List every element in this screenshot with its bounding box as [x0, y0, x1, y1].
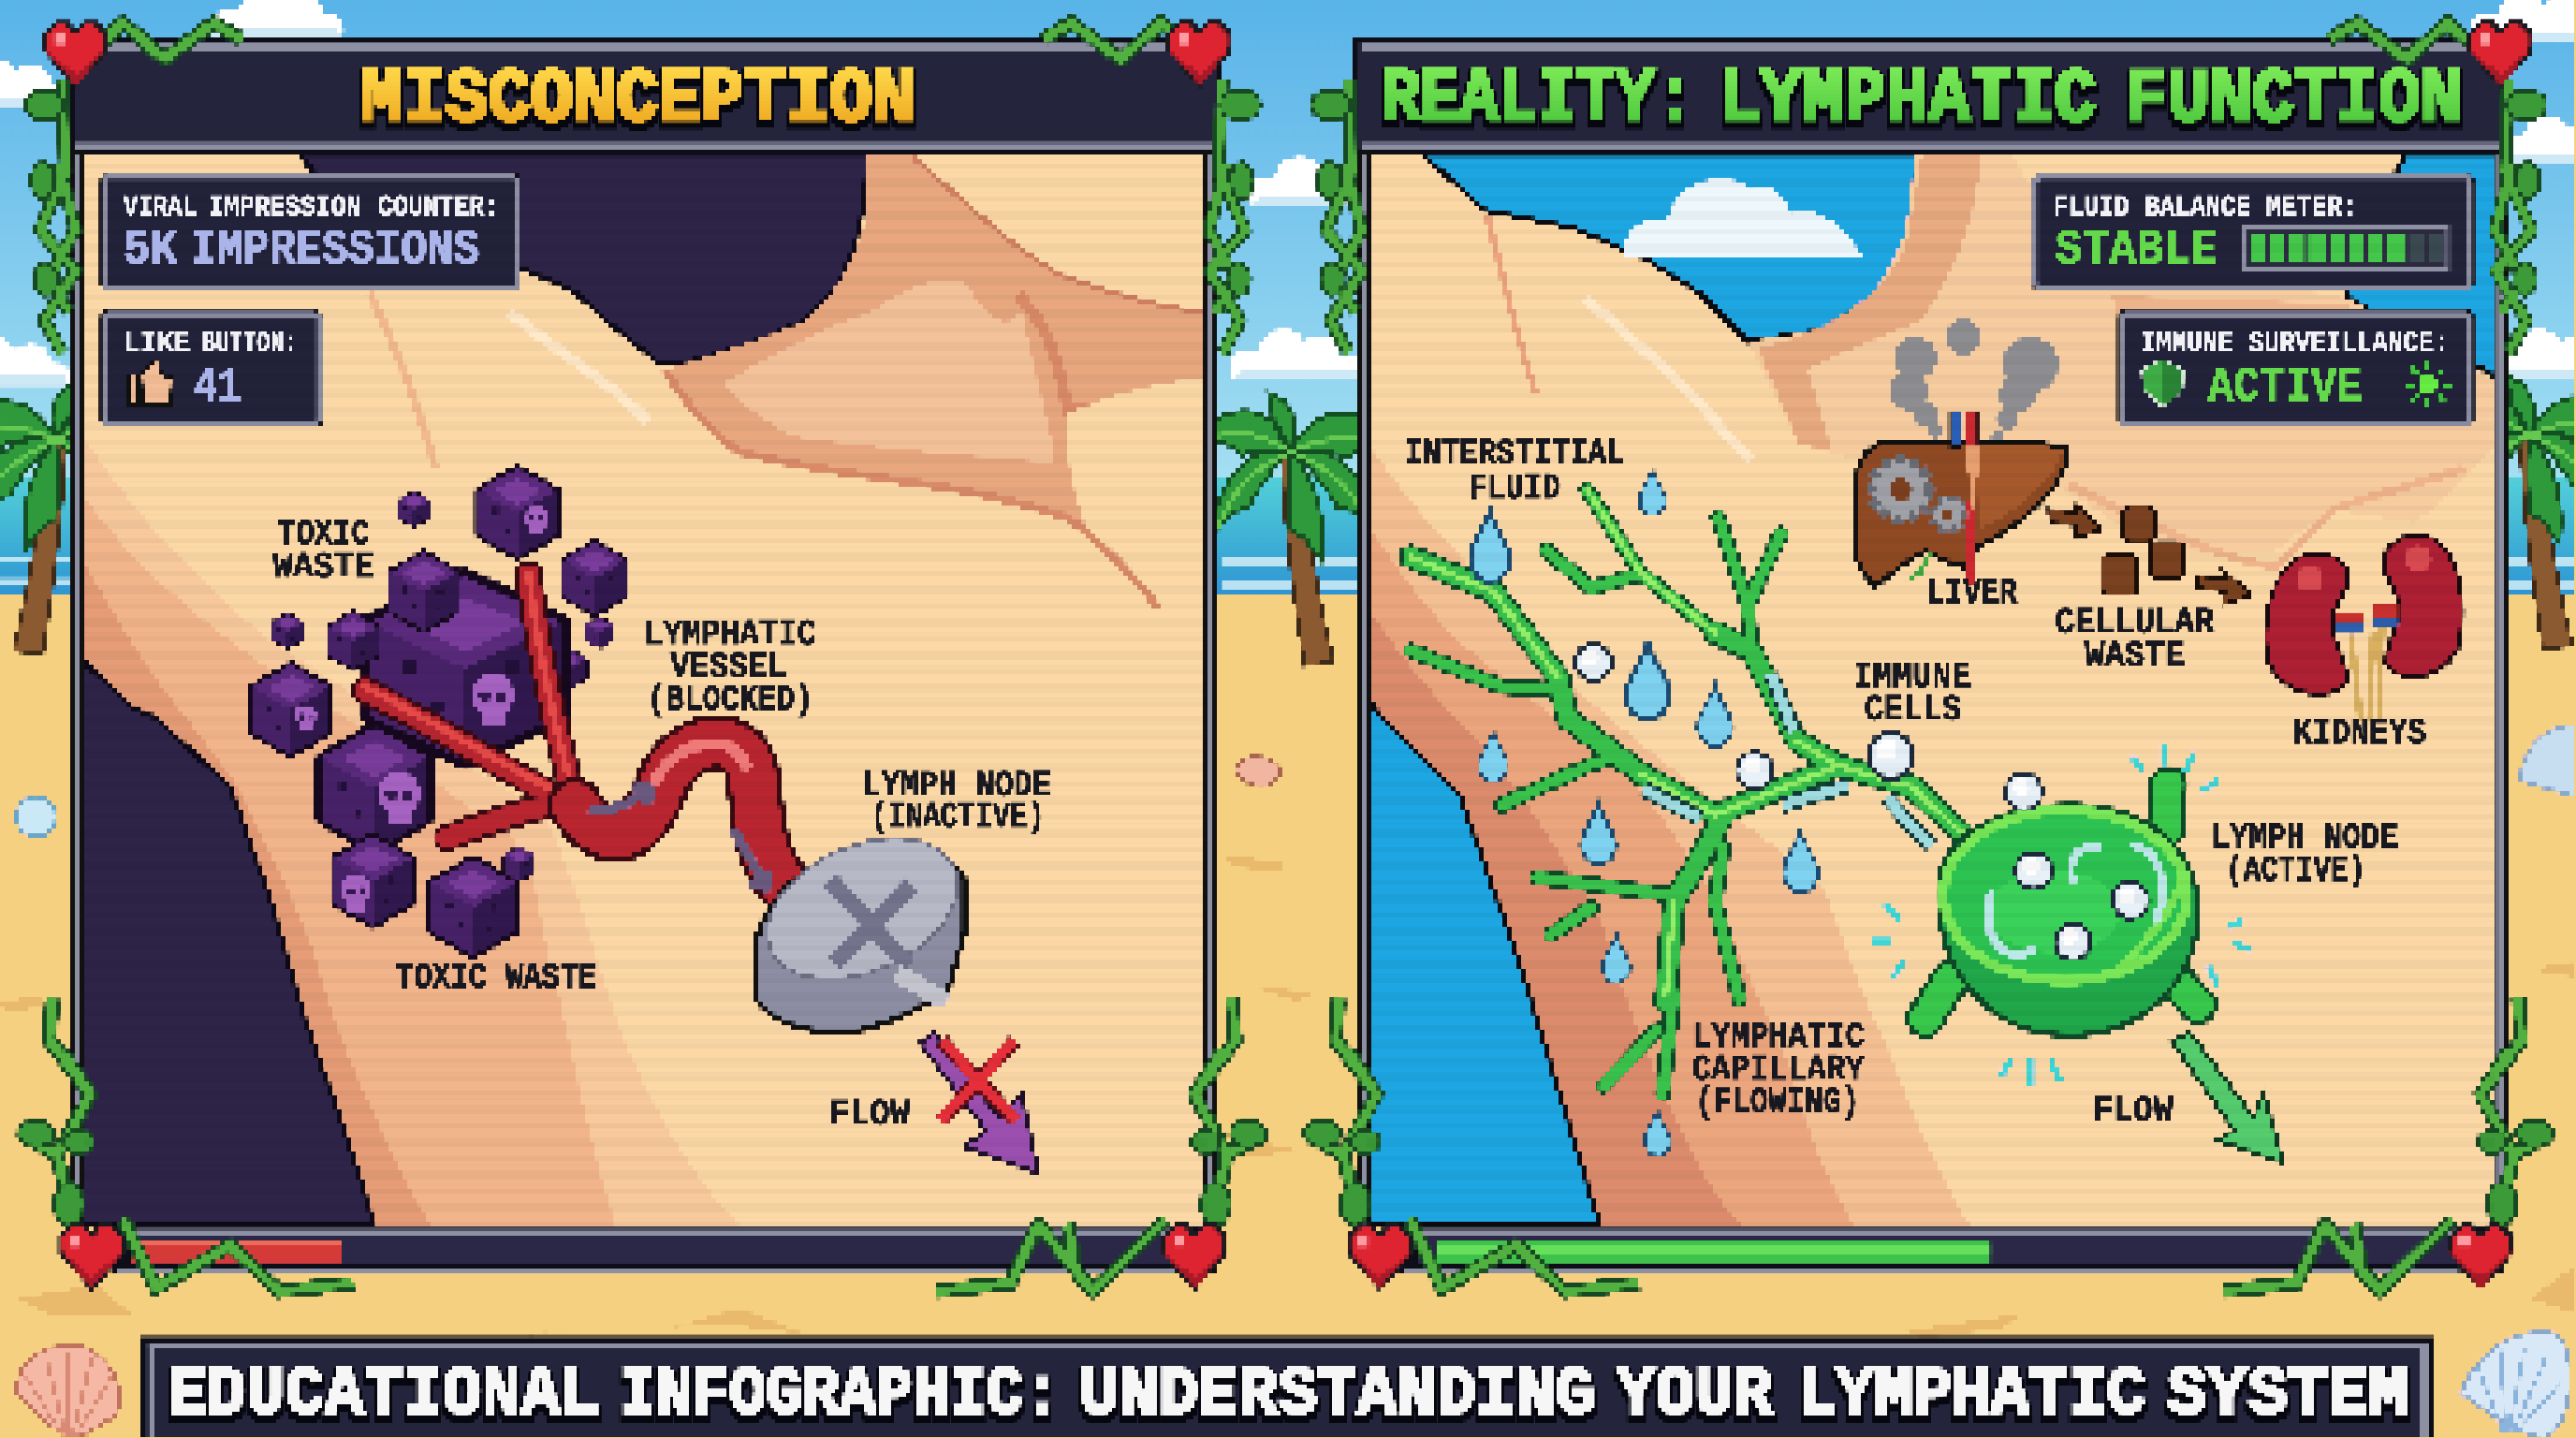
flow arrow active [2172, 1032, 2283, 1164]
heading: reality: REALITY: [1382, 58, 1693, 143]
labels: misconception panel [124, 192, 1051, 1135]
activity sparks [1873, 742, 2250, 1088]
label: cellular waste: CELLULAR [2056, 603, 2215, 644]
vessel flow arrows [1643, 674, 1930, 846]
label: liver: LIVER [1927, 573, 2018, 614]
label: lymph node inactive: (INACTIVE) [871, 797, 1045, 838]
palm trees [0, 376, 2576, 666]
heading: reality: FUNCTION [2126, 58, 2463, 143]
label: lymphatic vessel blocked: LYMPHATIC [644, 614, 816, 655]
frame sides [1358, 151, 2505, 1225]
counter value: IMPRESSIONS [191, 222, 479, 278]
hearts [1349, 23, 2531, 1288]
shell: blue seashell [2461, 1332, 2569, 1438]
icon: shield [2143, 360, 2183, 407]
vines [18, 23, 1266, 1291]
label: immune cells: CELLS [1865, 690, 1961, 731]
hearts [44, 23, 1230, 1288]
banner title: SYSTEM [2167, 1357, 2408, 1434]
label: cellular waste: WASTE [2085, 636, 2185, 677]
immune label: IMMUNE SURVEILLANCE: [2141, 329, 2450, 361]
progress bar green [1398, 1225, 2502, 1275]
artwork: misconception panel [18, 23, 1266, 1291]
fluid balance box [2032, 174, 2474, 291]
label: lymphatic vessel blocked: VESSEL [670, 647, 787, 688]
circular flow arrows [1988, 846, 2162, 954]
counter label: VIRAL [124, 192, 198, 225]
header bar [70, 41, 1217, 151]
counter value: 5K [124, 222, 178, 278]
label: kidneys: KIDNEYS [2293, 712, 2426, 754]
cellular waste [2048, 503, 2252, 605]
label: toxic waste upper: TOXIC [278, 514, 370, 555]
counter label: COUNTER: [378, 192, 500, 225]
lymph node active [1925, 785, 2198, 1035]
shell: pink seashell [17, 1345, 120, 1438]
flow arrow blocked [920, 1032, 1038, 1173]
smoke [1889, 318, 2058, 444]
banner title: UNDERSTANDING [1079, 1357, 1595, 1434]
immune value: ACTIVE [2208, 360, 2363, 416]
kidneys [2265, 536, 2462, 723]
banner title: EDUCATIONAL [168, 1357, 600, 1434]
header bar [1357, 41, 2504, 151]
label: lymphatic capillary flowing: LYMPHATIC [1692, 1017, 1865, 1058]
panel: misconception [18, 23, 1266, 1291]
blocked flow arrows inside vessel [588, 785, 768, 888]
fluid meter [2243, 227, 2448, 268]
label: lymph node active: (ACTIVE) [2226, 851, 2365, 892]
label: toxic waste lower: TOXIC WASTE [396, 958, 596, 999]
frame sides [72, 151, 1216, 1225]
vines [1304, 23, 2553, 1291]
heading: reality: LYMPHATIC [1719, 58, 2096, 143]
footer banner [144, 1339, 2431, 1438]
lymphatic vessel blocked [365, 575, 792, 892]
label: lymphatic capillary flowing: CAPILLARY [1692, 1049, 1866, 1091]
blue sky upper region [1423, 154, 1915, 342]
counter label: IMPRESSION [209, 192, 361, 225]
label: lymphatic capillary flowing: (FLOWING) [1695, 1082, 1860, 1123]
shoulder folds [370, 154, 1208, 608]
label: lymph node inactive: LYMPH NODE [862, 765, 1051, 806]
like label: BUTTON: [202, 329, 298, 361]
lymphatic capillaries [1412, 490, 1978, 1094]
banner title: LYMPHATIC [1797, 1357, 2145, 1434]
panel: reality [1304, 23, 2553, 1291]
shoulder folds [1486, 154, 2496, 566]
label: immune cells: IMMUNE [1853, 657, 1971, 698]
like label: LIKE [124, 329, 191, 361]
sky upper right corner [2348, 154, 2496, 376]
label: interstitial fluid: INTERSTITIAL [1405, 433, 1625, 475]
viral impression counter box [100, 174, 520, 291]
artwork: reality panel [1304, 23, 2553, 1291]
label: lymph node active: LYMPH NODE [2211, 818, 2398, 859]
dark background lower region [82, 661, 374, 1225]
label: flow: FLOW [2093, 1091, 2174, 1132]
icon: thumbs up [128, 361, 172, 404]
banner title [168, 1357, 2408, 1434]
shells and pearls [17, 726, 2576, 836]
fluid meter value: STABLE [2056, 222, 2217, 278]
icon: green burst [2405, 361, 2451, 407]
cloud in window [1624, 179, 1863, 257]
label: flow: FLOW [829, 1093, 911, 1135]
skin shading bands [82, 435, 739, 1225]
like count: 41 [194, 360, 242, 416]
heading: misconception: MISCONCEPTION [359, 58, 915, 143]
toxic waste cubes [253, 468, 625, 955]
immune surveillance box [2117, 311, 2474, 427]
banner frame [144, 1339, 2431, 1438]
labels: reality panel [1405, 192, 2450, 1132]
liver [1854, 411, 2068, 587]
banner title: INFOGRAPHIC: [620, 1357, 1060, 1434]
interstitial fluid drops [1471, 469, 1818, 1155]
label: interstitial fluid: FLUID [1469, 468, 1560, 509]
label: toxic waste upper: WASTE [272, 547, 374, 588]
heading: reality [1382, 58, 2463, 143]
label: lymphatic vessel blocked: (BLOCKED) [647, 680, 813, 721]
banner title: YOUR [1617, 1357, 1773, 1434]
skin shading bands [1368, 444, 1969, 1225]
progress bar red [111, 1225, 1216, 1275]
like button box [100, 311, 322, 427]
fluid meter label: FLUID BALANCE METER: [2054, 192, 2357, 225]
lymph node inactive [745, 811, 979, 1033]
blue sky lower region [1368, 698, 1600, 1225]
dark background upper region [299, 154, 868, 361]
decorative clouds [0, 0, 2576, 386]
immune cells [1575, 644, 2149, 960]
